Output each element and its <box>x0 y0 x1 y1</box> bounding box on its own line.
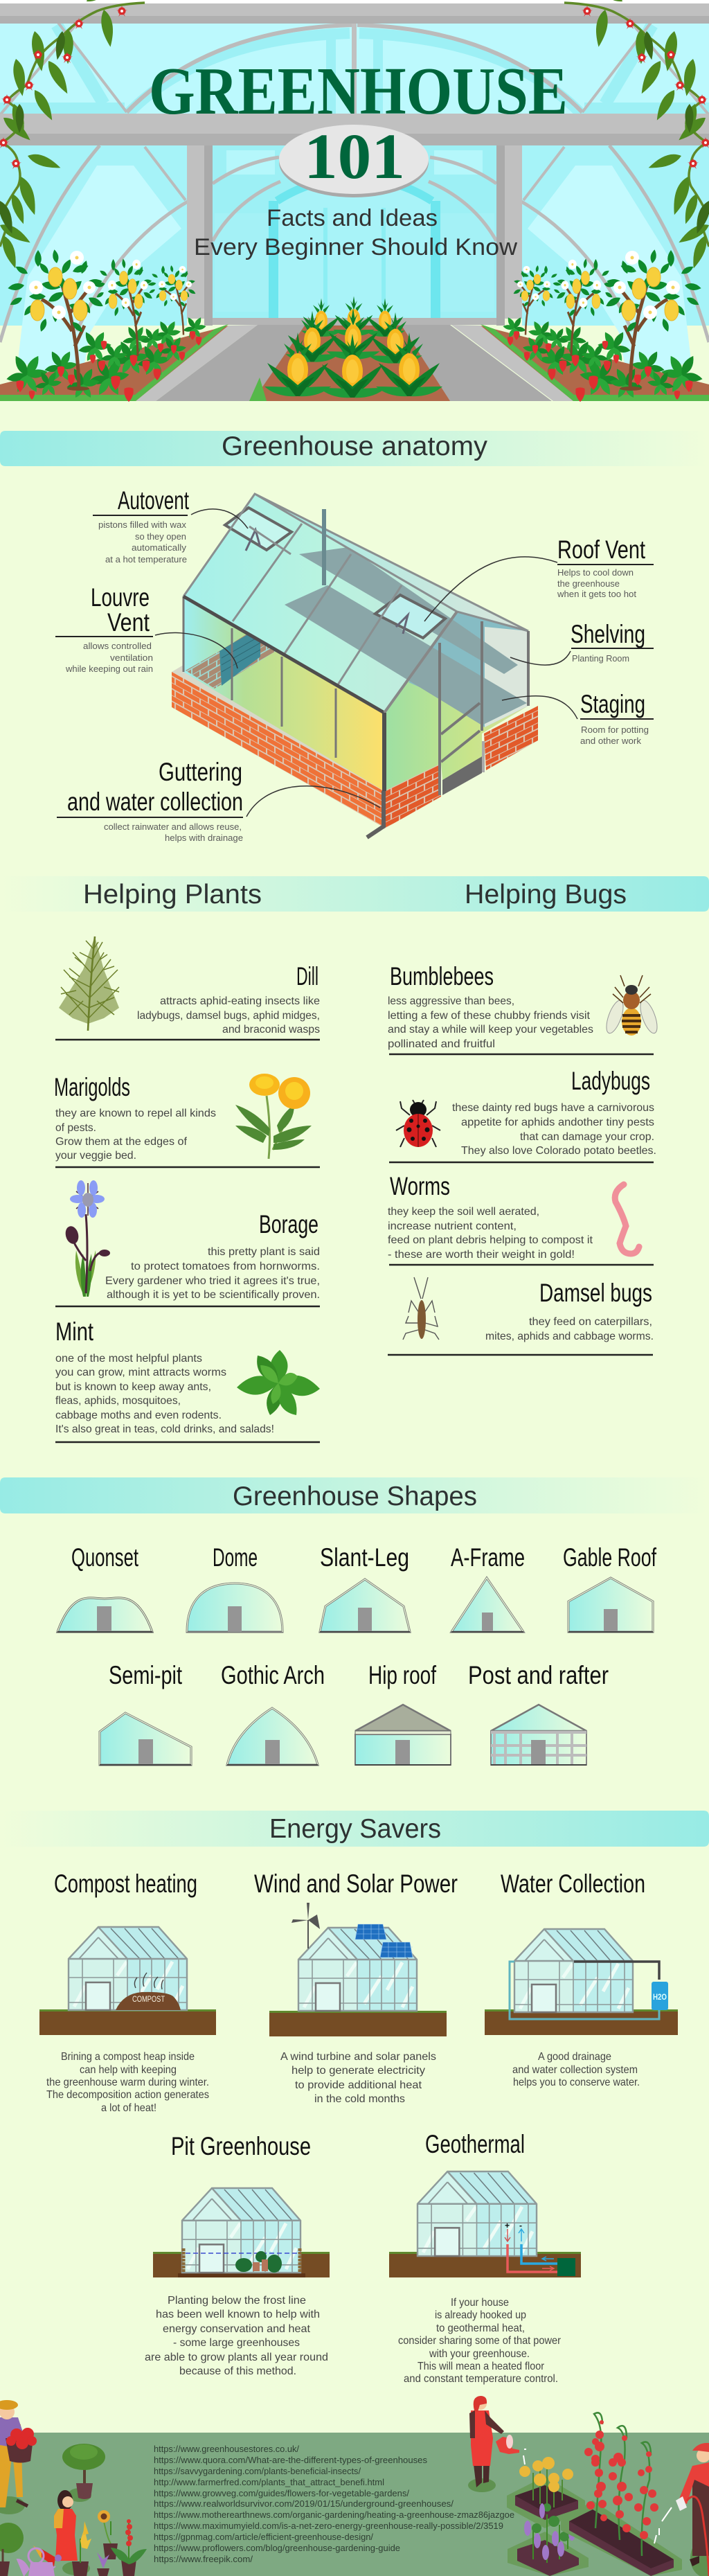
callout: Louvre Vent: Louvre <box>91 583 150 612</box>
lemon trees and strawberries right <box>481 249 709 402</box>
bug: Bumblebees text: less aggressive than bees, <box>388 995 514 1007</box>
caption: The decomposition action generates <box>46 2089 209 2101</box>
footer sources list: https://www.greenhousestores.co.uk/ <box>154 2444 300 2454</box>
panel: wind and solar power: Wind and Solar Power <box>254 1869 458 1898</box>
gutter downpipe <box>367 791 384 837</box>
callout: Louvre Vent: while keeping out rain <box>65 664 153 674</box>
gable end <box>384 612 528 791</box>
caption: This will mean a heated floor <box>418 2361 545 2372</box>
shape: Post and rafter: Post and rafter <box>468 1661 609 1689</box>
roof vent <box>375 595 445 638</box>
illustration: geothermal greenhouse: + <box>505 2221 510 2230</box>
panel: compost heating: Compost heating <box>54 1869 197 1898</box>
callout: Staging: and other work <box>580 736 642 746</box>
caption: help to generate electricity <box>291 2065 425 2077</box>
title: GREENHOUSE <box>149 54 568 129</box>
plant: Marigolds text: Marigolds <box>54 1073 130 1101</box>
caption: the greenhouse warm during winter. <box>46 2077 209 2088</box>
caption <box>512 2051 640 2088</box>
plant: Mint text: fleas, aphids, mosquitoes, <box>55 1395 181 1407</box>
plant: Dill text: ladybugs, damsel bugs, aphid midges, <box>137 1010 320 1022</box>
tomato planter <box>561 2413 682 2576</box>
callout: Roof Vent: the greenhouse <box>557 579 620 589</box>
bug: Bumblebees text: pollinated and fruitful <box>388 1038 495 1050</box>
caption <box>46 2051 209 2114</box>
plant: Mint text: It's also great in teas, cold drinks, and salads! <box>55 1423 274 1435</box>
bug: Ladybugs text: these dainty red bugs have a carnivorous <box>452 1102 654 1114</box>
illustration: geothermal greenhouse <box>389 2171 581 2277</box>
banner: Helping Plants / Helping Bugs <box>0 876 709 912</box>
shape: Hip roof: Hip roof <box>368 1661 437 1689</box>
illustration: wind and solar greenhouse <box>269 1903 447 2036</box>
caption <box>398 2297 562 2385</box>
shape: A-Frame: A-Frame <box>451 1543 525 1572</box>
plant: Marigolds text: your veggie bed. <box>55 1150 136 1162</box>
bug: Worms text: - these are worth their weight in gold! <box>388 1249 575 1261</box>
callout: Louvre Vent: allows controlled <box>83 641 152 651</box>
plant: Mint text: one of the most helpful plants <box>55 1353 202 1365</box>
caption: to provide additional heat <box>295 2079 422 2091</box>
callout: Guttering and water collection: helps with drainage <box>165 833 243 843</box>
bug: Ladybugs text: They also love Colorado potato beetles. <box>461 1145 656 1157</box>
bug: Ladybugs text: that can damage your crop. <box>520 1131 654 1143</box>
illustration: compost greenhouse <box>39 1927 216 2035</box>
footer sources list: http://www.farmerfred.com/plants_that_attract_benefi.html <box>154 2478 384 2487</box>
plant: Mint text <box>55 1317 320 1442</box>
plant: Dill text: and braconid wasps <box>222 1024 320 1036</box>
bug: Ladybugs text: Ladybugs <box>571 1067 650 1095</box>
bug: Damsel bugs text: Damsel bugs <box>539 1279 652 1307</box>
banner: Greenhouse anatomy: Greenhouse anatomy <box>222 432 488 461</box>
badge 101: 101 <box>304 121 405 193</box>
bug: Bumblebees text: and stay a while will keep your vegetables <box>388 1024 593 1036</box>
caption: helps you to conserve water. <box>513 2077 640 2088</box>
footer sources list: https://www.proflowers.com/blog/greenhouse-gardening-guide <box>154 2543 400 2553</box>
plant: Mint text: Mint <box>55 1317 94 1346</box>
callout: Guttering and water collection: collect rainwater and allows reuse, <box>104 822 242 832</box>
callout: Shelving <box>510 620 654 665</box>
caption: A wind turbine and solar panels <box>280 2051 436 2063</box>
banner: Helping Plants / Helping Bugs: Helping Bugs <box>465 880 627 909</box>
shape: Gothic Arch: Gothic Arch <box>221 1661 325 1689</box>
shape: Semi-pit <box>100 1661 191 1765</box>
caption: and water collection system <box>512 2064 638 2076</box>
plant: Dill text: attracts aphid-eating insects like <box>160 995 320 1007</box>
anatomy greenhouse illustration <box>172 494 538 837</box>
caption <box>280 2051 436 2105</box>
footer sources list <box>154 2444 514 2564</box>
panel: geothermal <box>389 2130 581 2385</box>
callout: Louvre Vent: Vent <box>107 608 150 637</box>
floor path <box>136 325 573 401</box>
subtitle: Every Beginner Should Know <box>194 234 517 260</box>
footer sources list: https://gpnmag.com/article/efficient-greenhouse-design/ <box>154 2532 374 2542</box>
shape: Semi-pit: Semi-pit <box>109 1661 183 1689</box>
illustration: pit greenhouse <box>153 2188 330 2277</box>
caption: because of this method. <box>179 2365 296 2377</box>
callout: Guttering and water collection <box>57 758 380 843</box>
plant: Marigolds text: Grow them at the edges of <box>55 1136 188 1148</box>
banner: Greenhouse Shapes <box>0 1477 709 1513</box>
icon: mint <box>237 1350 320 1415</box>
callout: Louvre Vent <box>55 583 237 674</box>
illustration: water collection greenhouse: H2O <box>653 1992 667 2002</box>
top beam <box>0 3 709 114</box>
bug: Ladybugs text: appetite for aphids andother tiny pests <box>461 1117 654 1128</box>
callout: Autovent: at a hot temperature <box>105 555 187 565</box>
shape: Dome: Dome <box>213 1543 258 1572</box>
icon: damsel bug <box>403 1277 439 1340</box>
callout: Guttering and water collection: and water collection <box>67 788 243 816</box>
gardener watering <box>468 2396 526 2492</box>
callout: Staging: Staging <box>580 690 645 718</box>
callout: Autovent: so they open <box>135 532 186 542</box>
callout: Autovent: pistons filled with wax <box>98 520 187 530</box>
glass house structure right <box>354 6 709 391</box>
footer sources list: https://savvygardening.com/plants-beneficial-insects/ <box>154 2467 361 2476</box>
caption: to geothermal heat, <box>436 2322 525 2334</box>
shape: Post and rafter <box>468 1661 609 1765</box>
caption: Planting below the frost line <box>168 2295 306 2307</box>
caption: consider sharing some of that power <box>398 2335 562 2347</box>
plant: Borage text: this pretty plant is said <box>208 1246 320 1258</box>
bug: Worms text: feed on plant debris helping to compost it <box>388 1234 593 1246</box>
panel: wind and solar power <box>254 1869 458 2105</box>
shape: Slant-Leg <box>320 1543 410 1632</box>
shelving and staging <box>285 547 527 725</box>
flower planter <box>507 2457 585 2528</box>
plant: Borage text <box>55 1210 320 1306</box>
callout: Shelving: Planting Room <box>572 654 629 664</box>
caption: can help with keeping <box>80 2064 177 2076</box>
caption: in the cold months <box>314 2093 405 2105</box>
callout: Roof Vent <box>424 535 654 621</box>
caption <box>145 2295 328 2377</box>
centre bed with pineapples <box>249 296 450 401</box>
eggplant planter <box>508 2503 589 2576</box>
shape: Quonset: Quonset <box>71 1543 138 1572</box>
caption: are able to grow plants all year round <box>145 2352 328 2363</box>
shape: Gable Roof: Gable Roof <box>563 1543 657 1572</box>
plant: Borage text: although it is yet to be scientifically proven. <box>107 1289 320 1301</box>
bug: Damsel bugs text: they feed on caterpillars, <box>529 1316 652 1328</box>
caption: If your house <box>451 2297 509 2309</box>
icon: dill <box>59 936 119 1031</box>
plant: Dill text <box>55 962 320 1040</box>
icon: bumblebee <box>603 975 661 1036</box>
callout: Roof Vent: Helps to cool down <box>557 568 634 578</box>
callout: Louvre Vent: ventilation <box>110 653 153 663</box>
panel: geothermal: Geothermal <box>425 2130 525 2158</box>
panel: compost heating <box>39 1869 216 2114</box>
illustration: water collection greenhouse <box>485 1929 678 2035</box>
bug: Worms text: Worms <box>390 1172 450 1200</box>
shape: A-Frame <box>451 1543 525 1632</box>
bug: Damsel bugs text: mites, aphids and cabbage worms. <box>485 1331 654 1342</box>
icon: ladybug <box>396 1100 440 1147</box>
shape: Gable Roof <box>563 1543 657 1632</box>
banner: Energy Savers <box>0 1811 709 1847</box>
bug: Worms text <box>388 1172 654 1265</box>
shape: Slant-Leg: Slant-Leg <box>320 1543 409 1572</box>
caption: and constant temperature control. <box>404 2373 558 2385</box>
callout: Staging: Room for potting <box>581 725 649 735</box>
plant: Mint text: you can grow, mint attracts worms <box>55 1367 226 1378</box>
footer sources list: https://www.quora.com/What-are-the-different-types-of-greenhouses <box>154 2455 427 2465</box>
plant: Mint text: cabbage moths and even rodents. <box>55 1410 222 1421</box>
callout: Guttering and water collection: Guttering <box>159 758 242 786</box>
farmer with strawberries <box>0 2400 37 2514</box>
panel: water collection: Water Collection <box>501 1869 645 1898</box>
caption: Brining a compost heap inside <box>61 2051 195 2063</box>
sunflower and red flowers <box>97 2510 147 2576</box>
callout: Autovent <box>93 486 248 565</box>
callout: Roof Vent: when it gets too hot <box>557 589 637 599</box>
caption: energy conservation and heat <box>163 2323 311 2335</box>
panel: pit greenhouse: Pit Greenhouse <box>171 2132 311 2160</box>
icon: borage <box>64 1180 110 1297</box>
plant: Borage text: Every gardener who tried it agrees it's true, <box>105 1275 320 1287</box>
plant: Marigolds text: they are known to repel all kinds <box>55 1108 216 1119</box>
long glass wall <box>183 596 384 791</box>
banner: Greenhouse anatomy <box>0 431 709 466</box>
caption: with your greenhouse. <box>429 2348 530 2360</box>
icon: worm <box>615 1184 639 1254</box>
subtitle <box>194 205 517 260</box>
bug: Bumblebees text <box>388 962 654 1054</box>
plant: Marigolds text <box>54 1073 320 1167</box>
vine right <box>564 0 709 270</box>
shape: Quonset <box>57 1543 152 1632</box>
autovent <box>225 508 291 551</box>
near roof glazing <box>183 494 457 713</box>
icon: marigold <box>235 1074 312 1159</box>
callout: Shelving: Shelving <box>571 620 645 648</box>
caption: - some large greenhouses <box>173 2337 300 2349</box>
bug: Damsel bugs text <box>388 1279 654 1355</box>
caption: A good drainage <box>538 2051 611 2063</box>
footer sources list: https://www.maximumyield.com/is-a-net-zero-energy-greenhouse-really-possible/2/3519 <box>154 2521 503 2531</box>
caption: a lot of heat! <box>101 2102 156 2114</box>
gardener with hose <box>654 2443 709 2576</box>
footer sources list: https://www.freepik.com/ <box>154 2555 253 2564</box>
vine left <box>0 0 145 270</box>
callout: Autovent: automatically <box>132 543 187 553</box>
subtitle: Facts and Ideas <box>267 205 438 231</box>
bug: Bumblebees text: letting a few of these chubby friends visit <box>388 1010 591 1022</box>
bug: Bumblebees text: Bumblebees <box>390 962 494 991</box>
caption: has been well known to help with <box>156 2309 320 2320</box>
tree and watering can lower left <box>0 2523 62 2576</box>
callout: Autovent: Autovent <box>118 486 189 515</box>
footer sources list: https://www.motherearthnews.com/organic-gardening/heating-a-greenhouse-zmaz86jazgoe <box>154 2510 514 2520</box>
plant: Mint text: but is known to keep away ants, <box>55 1381 211 1393</box>
bug: Worms text: they keep the soil well aerated, <box>388 1206 539 1218</box>
kneeling gardener with pots <box>33 2490 91 2576</box>
shape: Hip roof <box>355 1661 451 1765</box>
plant: Dill text: Dill <box>296 962 318 991</box>
plant: Marigolds text: of pests. <box>55 1122 96 1134</box>
footer sources list: https://www.realworldsurvivor.com/2019/01/15/underground-greenhouses/ <box>154 2499 454 2509</box>
banner: Greenhouse Shapes: Greenhouse Shapes <box>233 1482 477 1511</box>
main cross beam <box>0 114 709 145</box>
footer band <box>0 2433 709 2576</box>
bug: Ladybugs text <box>389 1067 656 1162</box>
illustration: geothermal greenhouse: - <box>519 2221 522 2230</box>
callout: Roof Vent: Roof Vent <box>557 535 646 564</box>
glass house structure left <box>0 6 354 391</box>
shape: Dome <box>187 1543 282 1632</box>
far roof glazing <box>255 494 528 631</box>
lemon trees and strawberries left <box>0 249 228 402</box>
illustration: compost greenhouse: COMPOST <box>132 1994 165 2004</box>
panel: water collection <box>485 1869 678 2088</box>
shape: Gothic Arch <box>221 1661 325 1765</box>
footer sources list: https://www.growveg.com/guides/flowers-for-vegetable-gardens/ <box>154 2489 410 2498</box>
panel: pit greenhouse <box>145 2132 330 2377</box>
banner: Helping Plants / Helping Bugs: Helping Plants <box>83 880 262 909</box>
bug: Worms text: increase nutrient content, <box>388 1220 517 1232</box>
caption: is already hooked up <box>435 2309 526 2321</box>
plant: Borage text: Borage <box>259 1210 318 1238</box>
callout: Staging <box>502 690 654 746</box>
banner: Energy Savers: Energy Savers <box>269 1814 441 1844</box>
badge 101 <box>279 121 429 197</box>
back brick wall and louvre <box>186 607 318 689</box>
plant: Borage text: to protect tomatoes from hornworms. <box>131 1261 320 1272</box>
panel: header illustration <box>0 0 709 402</box>
potted tree <box>62 2444 105 2502</box>
frame <box>183 494 528 795</box>
brick base walls <box>172 665 538 829</box>
